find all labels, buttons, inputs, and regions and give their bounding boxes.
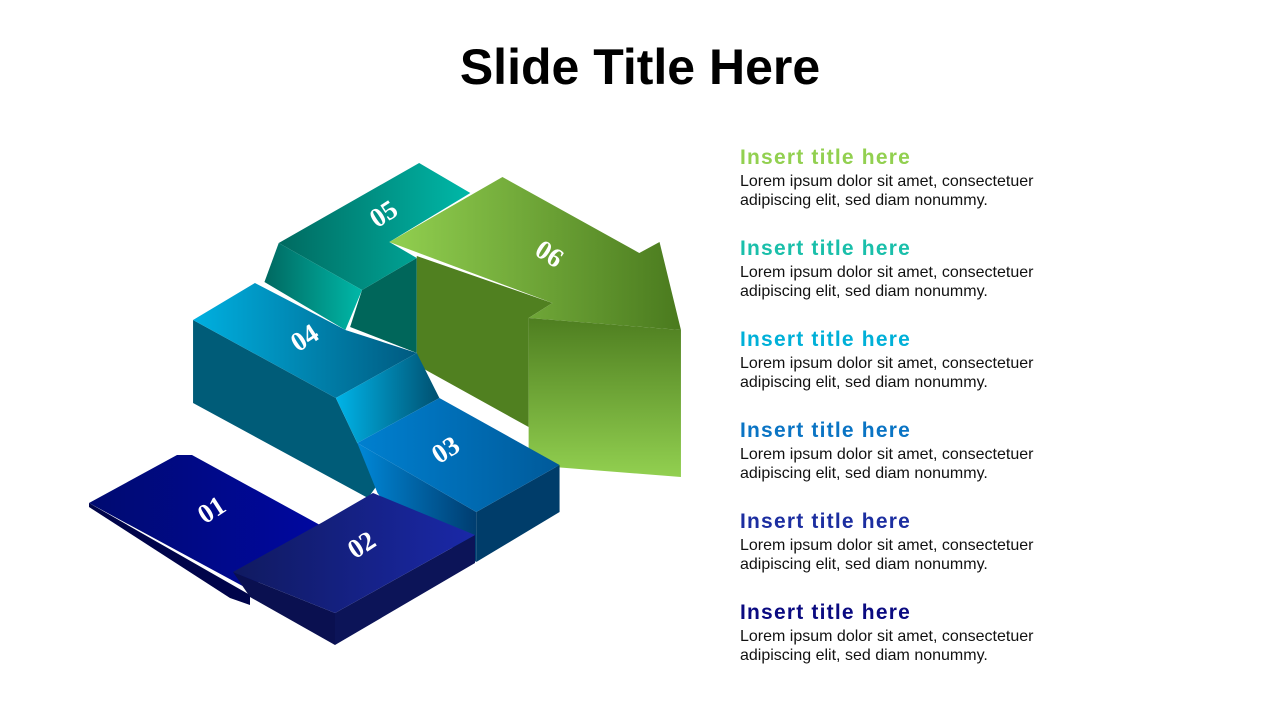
text item 02: Insert title here [740, 510, 911, 533]
step 05 block [264, 163, 470, 353]
step 05 block: 05 [364, 194, 403, 234]
text item 03 [740, 419, 1034, 482]
step 03 block: 03 [426, 430, 465, 470]
text item 03: Lorem ipsum dolor sit amet, consectetuer adipiscing elit, sed diam nonummy. [740, 446, 1033, 482]
step 01 block [89, 455, 320, 605]
text item 01: Lorem ipsum dolor sit amet, consectetuer adipiscing elit, sed diam nonummy. [740, 628, 1033, 664]
text item 03: Insert title here [740, 419, 911, 442]
text item 06: Insert title here [740, 146, 911, 169]
title: Slide Title Here [460, 39, 820, 95]
text item 04: Lorem ipsum dolor sit amet, consectetuer adipiscing elit, sed diam nonummy. [740, 355, 1033, 391]
text item 06: Lorem ipsum dolor sit amet, consectetuer adipiscing elit, sed diam nonummy. [740, 173, 1033, 209]
step 02 block [233, 493, 475, 645]
text item 05 [740, 237, 1034, 300]
step 06 arrow [389, 177, 681, 477]
step 04 block [193, 283, 439, 498]
step 01 block: 01 [192, 490, 231, 530]
text item 01: Insert title here [740, 601, 911, 624]
text item 06 [740, 146, 1034, 209]
text item 01 [740, 601, 1034, 664]
step 03 block [357, 398, 560, 562]
step 04 block: 04 [285, 318, 324, 358]
step 06 arrow: 06 [530, 234, 569, 274]
step 02 block: 02 [342, 525, 381, 565]
text item 05: Lorem ipsum dolor sit amet, consectetuer adipiscing elit, sed diam nonummy. [740, 264, 1033, 300]
text item 04 [740, 328, 1034, 391]
text item 02: Lorem ipsum dolor sit amet, consectetuer adipiscing elit, sed diam nonummy. [740, 537, 1033, 573]
text item 05: Insert title here [740, 237, 911, 260]
text item 04: Insert title here [740, 328, 911, 351]
text item 02 [740, 510, 1034, 573]
